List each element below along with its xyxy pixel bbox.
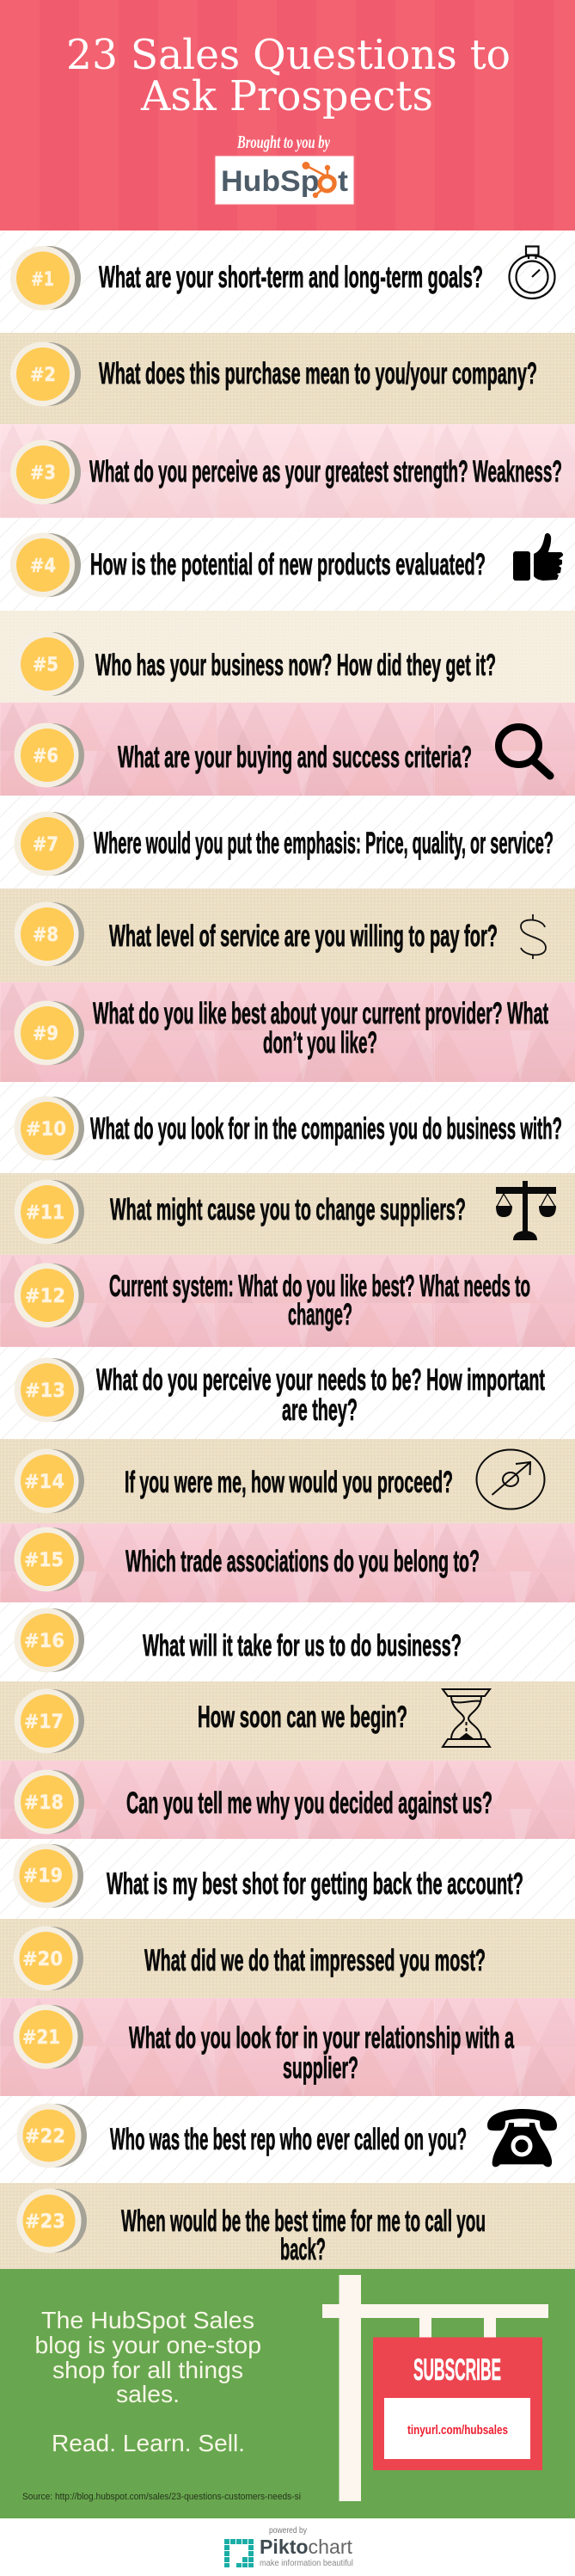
piktochart logo mark xyxy=(224,2539,254,2567)
panel: subscribe call to action xyxy=(0,2269,575,2518)
badge 10: #10 xyxy=(26,1119,66,1140)
badge 18: #18 xyxy=(24,1792,64,1814)
badge 22: #22 xyxy=(25,2126,65,2148)
panel: question 17 xyxy=(0,1681,575,1761)
panel: question 22 xyxy=(0,2096,575,2183)
piktochart wordmark: Piktochart xyxy=(260,2536,353,2558)
badge 1: #1 xyxy=(31,269,54,291)
panel: question 16 xyxy=(0,1602,575,1681)
badge 3: #3 xyxy=(30,463,56,484)
panel: question 14 xyxy=(0,1439,575,1523)
panel: question 3 xyxy=(0,424,575,518)
badge 8: #8 xyxy=(33,925,58,946)
badge 19 xyxy=(14,1844,83,1908)
panel: question 10 xyxy=(0,1082,575,1173)
question 9: don’t you like? xyxy=(263,1026,377,1060)
badge 9 xyxy=(14,1001,84,1065)
panel: question 8 xyxy=(0,888,575,982)
badge 17: #17 xyxy=(24,1712,64,1733)
question 21: supplier? xyxy=(283,2051,358,2085)
badge 9: #9 xyxy=(33,1024,58,1045)
hubspot logo: HubSpot xyxy=(221,165,348,198)
badge 13 xyxy=(14,1357,84,1423)
sign post xyxy=(322,2275,548,2501)
badge 12 xyxy=(14,1263,84,1328)
panel: question 21 xyxy=(0,1998,575,2096)
hubspot logo xyxy=(215,156,354,205)
blog text xyxy=(34,2307,261,2456)
icon: magnifier xyxy=(499,727,550,776)
panel: question 11 xyxy=(0,1173,575,1255)
panel: question 5 xyxy=(0,611,575,703)
panel: question 9 xyxy=(0,982,575,1082)
badge 23 xyxy=(17,2188,87,2253)
brought to you by: Brought to you by xyxy=(236,132,330,152)
blog text: The HubSpot Sales xyxy=(41,2307,254,2333)
question 9 xyxy=(93,997,548,1060)
panel: question 13 xyxy=(0,1347,575,1439)
icon: thumbs up xyxy=(513,533,563,581)
badge 16 xyxy=(14,1608,84,1672)
badge 15: #15 xyxy=(24,1550,64,1571)
badge 10 xyxy=(14,1096,84,1161)
badge 5: #5 xyxy=(33,655,58,676)
badge 6: #6 xyxy=(33,746,58,767)
tagline: make information beautiful xyxy=(260,2559,353,2568)
question 23: back? xyxy=(280,2233,326,2266)
title: Ask Prospects xyxy=(140,72,433,120)
question 21 xyxy=(129,2021,514,2085)
question 23 xyxy=(121,2204,486,2266)
panel: question 15 xyxy=(0,1523,575,1602)
panel: question 4 xyxy=(0,518,575,611)
badge 7: #7 xyxy=(33,834,58,856)
badge 22 xyxy=(17,2104,87,2167)
badge 16: #16 xyxy=(24,1631,64,1652)
icon: compass xyxy=(476,1450,545,1509)
subscribe sign: tinyurl.com/hubsales xyxy=(407,2423,508,2438)
panel: question 6 xyxy=(0,703,575,796)
badge 6 xyxy=(14,722,84,788)
question 12: change? xyxy=(288,1298,352,1331)
question 17: How soon can we begin? xyxy=(198,1700,407,1734)
blog text: blog is your one-stop xyxy=(34,2332,261,2358)
panel: question 1 xyxy=(0,231,575,333)
panel: question 7 xyxy=(0,796,575,888)
powered by: powered by xyxy=(269,2526,307,2536)
badge 7 xyxy=(14,812,84,876)
badge 2 xyxy=(10,342,81,406)
panel: question 23 xyxy=(0,2183,575,2269)
badge 4: #4 xyxy=(30,556,56,577)
panel: question 18 xyxy=(0,1761,575,1839)
badge 21 xyxy=(14,2004,83,2069)
icon: hourglass xyxy=(443,1689,490,1747)
subscribe sign xyxy=(373,2338,542,2470)
icon: stopwatch xyxy=(509,246,555,298)
badge 13: #13 xyxy=(25,1380,65,1402)
badge 5 xyxy=(14,631,84,697)
badge 14 xyxy=(14,1448,84,1514)
badge 14: #14 xyxy=(24,1472,64,1493)
badge 18 xyxy=(14,1770,84,1834)
badge 1 xyxy=(10,246,81,310)
blog text: shop for all things xyxy=(52,2357,243,2383)
footer: piktochart xyxy=(0,2518,575,2576)
badge 20 xyxy=(14,1927,83,1990)
blog text: Read. Learn. Sell. xyxy=(52,2430,245,2456)
question 13: are they? xyxy=(282,1393,358,1427)
source: Source: http://blog.hubspot.com/sales/23-questions-customers-needs-si xyxy=(22,2492,301,2502)
badge 2: #2 xyxy=(30,365,56,386)
blog text: sales. xyxy=(116,2381,180,2407)
header xyxy=(0,0,575,231)
badge 21: #21 xyxy=(22,2027,60,2049)
icon: scales xyxy=(496,1181,556,1240)
title: 23 Sales Questions to xyxy=(66,31,511,79)
panel: question 2 xyxy=(0,333,575,424)
badge 23: #23 xyxy=(25,2211,65,2233)
panel: question 12 xyxy=(0,1255,575,1347)
badge 11 xyxy=(14,1180,84,1244)
panel: question 20 xyxy=(0,1919,575,1998)
badge 11: #11 xyxy=(26,1202,64,1224)
badge 3 xyxy=(10,440,81,504)
badge 19: #19 xyxy=(23,1866,63,1887)
badge 20: #20 xyxy=(22,1949,63,1970)
question 13 xyxy=(96,1363,545,1427)
title xyxy=(66,31,511,120)
badge 12: #12 xyxy=(25,1286,65,1307)
question 12 xyxy=(109,1270,530,1331)
panel: question 19 xyxy=(0,1839,575,1919)
icon: telephone xyxy=(487,2109,557,2167)
badge 8 xyxy=(14,901,84,967)
icon: dollar sign xyxy=(521,914,546,959)
badge 17 xyxy=(14,1689,84,1753)
badge 4 xyxy=(10,533,81,597)
badge 15 xyxy=(14,1528,84,1591)
